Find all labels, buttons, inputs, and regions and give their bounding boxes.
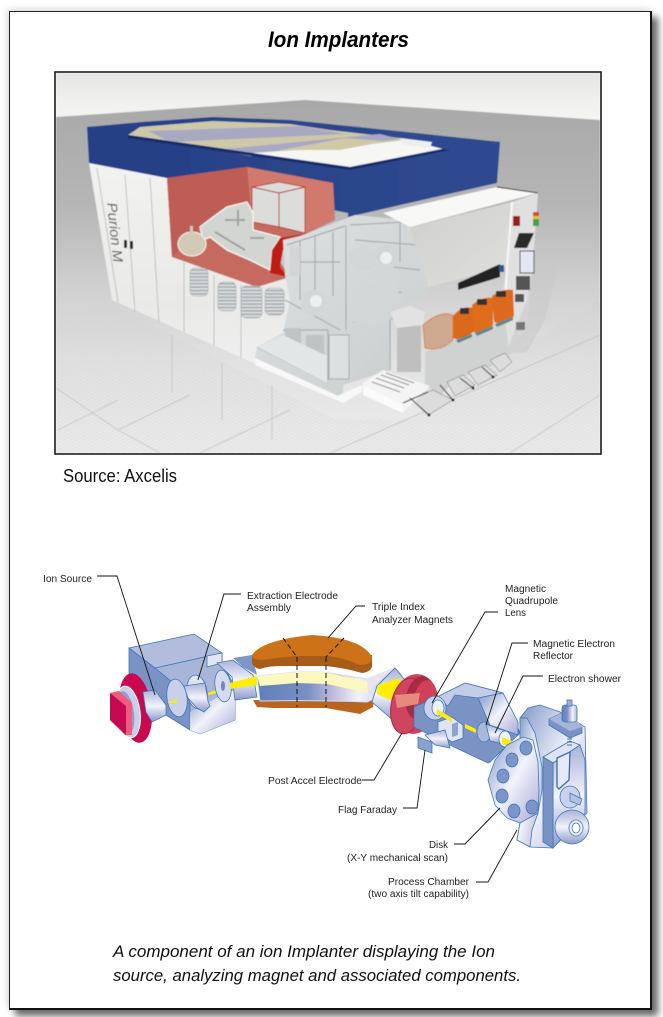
analyzer housing with lenses (414, 683, 520, 763)
process chamber (517, 700, 589, 848)
tall box and hood at load lock (397, 322, 421, 372)
wafer disk (488, 737, 539, 823)
photo: Purion M ion implanter machine (55, 72, 601, 454)
label: Triple Index Analyzer Magnets: Triple Index (372, 602, 425, 613)
label: Triple Index Analyzer Magnets (328, 602, 453, 638)
label: Magnetic Quadrupole Lens: Magnetic (505, 584, 546, 595)
console details (513, 216, 520, 226)
source credit: Source: Axcelis (63, 466, 177, 486)
label: Extraction Electrode Assembly: Extraction Electrode (247, 591, 338, 602)
diagram: ion implanter beamline (110, 634, 589, 848)
caption (112, 942, 521, 985)
label: Purion M on side panel: Purion M (104, 202, 126, 263)
title: Ion Implanters (268, 27, 409, 52)
springs (190, 268, 284, 318)
label: Magnetic Electron Reflector: Magnetic Electron (533, 639, 615, 650)
label: Magnetic Quadrupole Lens: Quadrupole (505, 596, 558, 607)
label: Process Chamber: (two axis tilt capability) (368, 889, 469, 900)
red cutaway enclosure (167, 167, 335, 287)
label: Disk: Disk (429, 840, 449, 851)
grey beamline machinery block (255, 215, 430, 398)
label: Magnetic Electron Reflector: Reflector (533, 651, 574, 662)
label: Magnetic Electron Reflector (486, 639, 615, 725)
label: Electron shower: Electron shower (548, 674, 622, 685)
right white console (383, 187, 538, 227)
white base plinth (255, 358, 362, 403)
orange wafer pods (423, 290, 514, 349)
post accel electrode (372, 668, 443, 738)
label: Post Accel Electrode (268, 733, 402, 787)
label: Ion Source (43, 574, 155, 695)
label: Disk: (X-Y mechanical scan) (347, 853, 448, 864)
left white side panels (88, 162, 290, 363)
flag faraday (418, 730, 450, 753)
label: Flag Faraday (338, 750, 425, 816)
label: Electron shower (495, 674, 622, 733)
caption: A component of an ion Implanter displaying the Ion (112, 942, 495, 961)
label: Extraction Electrode Assembly: Assembly (247, 603, 291, 614)
label: Magnetic Quadrupole Lens (432, 584, 558, 703)
blue frame (87, 117, 500, 217)
ion source (110, 671, 166, 745)
label: Flag Faraday: Flag Faraday (338, 805, 397, 816)
label: Process Chamber (368, 830, 517, 900)
caption: source, analyzing magnet and associated components. (113, 966, 521, 985)
label: Process Chamber: Process Chamber (388, 877, 470, 888)
wafer tray (363, 370, 430, 413)
label: Disk (347, 808, 500, 864)
white box in enclosure (252, 182, 305, 233)
top cover panels (128, 120, 402, 150)
label: Magnetic Quadrupole Lens: Lens (505, 608, 526, 619)
label: Ion Source: Ion Source (43, 574, 92, 585)
extraction housing box (129, 634, 257, 734)
wafer load ports (425, 320, 510, 395)
label: Extraction Electrode Assembly (198, 591, 338, 680)
ion source machinery (200, 202, 280, 270)
triple index analyzer magnets (252, 635, 402, 714)
label: Triple Index Analyzer Magnets: Analyzer Magnets (372, 615, 453, 626)
label: Post Accel Electrode: Post Accel Electrode (268, 776, 362, 787)
